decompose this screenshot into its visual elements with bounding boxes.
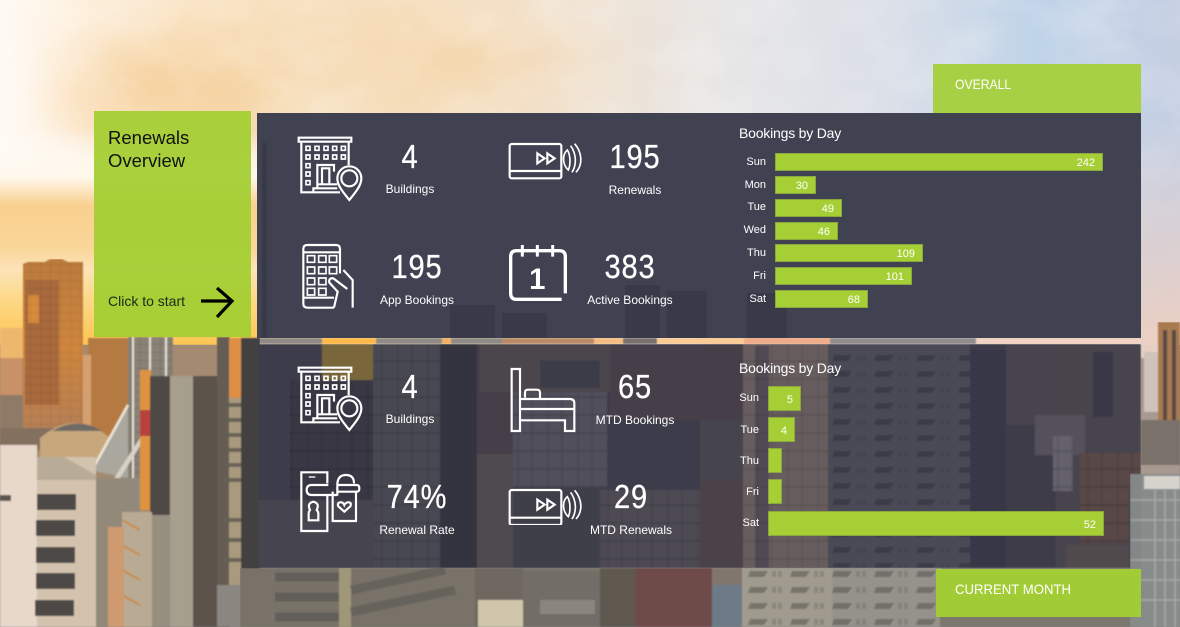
bar: Sun 5: 5 [787,394,793,406]
metric: 383 active bookings [587,248,673,307]
bar: Mon 30 [775,176,816,194]
value: 195 [391,248,443,285]
bar: Wed 46 [775,222,838,240]
value: 65 [618,368,652,405]
icon: arrow [201,286,234,318]
icon: building with pin [298,366,362,432]
metric: 4 buildings [386,138,434,196]
bar chart: overall bookings by day: Sat [749,293,766,305]
bar chart: current month bookings by day [739,360,1104,536]
label: MTD Renewals [590,523,672,537]
icon: bed [510,368,576,432]
icon: contactless card renewal [508,488,582,525]
bar: Sat 68: 68 [848,294,860,306]
bar chart: overall bookings by day: Mon [745,179,766,191]
skyline seen through the lower panel [258,344,1141,568]
bar: Sat 52 [768,511,1104,536]
value: 195 [609,138,661,175]
label: Buildings [386,182,434,196]
metric: 195 renewals [609,138,661,197]
bar chart: overall bookings by day: Fri [753,270,766,282]
value: 74% [387,478,447,515]
value: 4 [401,138,419,175]
bar chart: current month bookings by day: Sun [739,392,759,404]
horizon strip between panels [257,338,1141,344]
heading: Renewals Overview [108,127,189,171]
bar: Tue 49 [775,199,842,217]
bar: Sun 5 [768,386,801,411]
metric: 29 MTD renewals [590,478,672,537]
bar chart: overall bookings by day: Sun [746,156,766,168]
bar chart: overall bookings by day: Thu [747,247,766,259]
metric: 195 app bookings [380,248,454,307]
label: MTD Bookings [596,413,674,427]
bar chart: current month bookings by day: Fri [746,486,759,498]
label: Buildings [386,412,434,426]
bar: Fri [768,479,782,504]
icon: calendar [509,245,567,301]
label: Renewals [609,183,661,197]
value: 383 [604,248,656,285]
panel: title tile [94,111,251,337]
bar chart: overall bookings by day: Wed [744,224,766,236]
icon: calendar: 1 [529,263,545,296]
heading: Renewals Overview: Renewals [108,127,189,148]
icon: phone with hand [302,244,354,309]
heading: Renewals Overview: Overview [108,150,185,171]
text: click to start: Click to start [108,293,185,309]
bar chart: current month bookings by day: Tue [740,424,759,436]
label: App Bookings [380,293,454,307]
metric: 74% renewal rate [379,478,455,537]
bar: Wed 46: 46 [818,226,830,238]
value: 4 [401,368,419,405]
bar: Sat 68 [775,290,868,308]
bar: Thu 109 [775,244,923,262]
faint skyline through panel [262,143,787,338]
skyline right of panels [1130,322,1180,627]
bar: Sun 242 [775,153,1103,171]
tab: overall [933,64,1141,113]
icon: contactless card renewal [508,142,582,180]
bar: Tue 4 [768,417,795,442]
value: 29 [614,478,648,515]
bar chart: current month bookings by day: Thu [740,455,759,467]
bar chart: overall bookings by day: Tue [747,201,766,213]
tab label: overall: OVERALL [955,76,1011,92]
chart title: Bookings by Day [739,125,841,141]
tab label: current month: CURRENT MONTH [955,581,1071,597]
bar: Thu 109: 109 [897,248,915,260]
bar chart: current month bookings by day: Sat [742,517,759,529]
label: Renewal Rate [379,523,455,537]
chart title: Bookings by Day [739,360,841,376]
metric: 4 buildings month [386,368,434,426]
bar: Tue 4: 4 [781,425,787,437]
bar: Sun 242: 242 [1077,157,1095,169]
skyline left of panels [0,259,260,627]
bar: Tue 49: 49 [822,203,834,215]
bar: Fri 101: 101 [886,271,904,283]
bar: Mon 30: 30 [796,180,808,192]
label: Active Bookings [587,293,673,307]
bar: Sat 52: 52 [1084,519,1096,531]
metric: 65 MTD bookings [596,368,674,427]
bar: Fri 101 [775,267,912,285]
icon: door handle and hanger [300,471,360,532]
bar chart: overall bookings by day [739,125,1103,308]
bar: Thu [768,448,782,473]
icon: building with pin [298,136,362,202]
skyline below lower panel [240,568,1140,627]
panel: current month metrics [258,344,1141,568]
panel: overall metrics [257,113,1141,338]
tab: current month [936,569,1141,617]
